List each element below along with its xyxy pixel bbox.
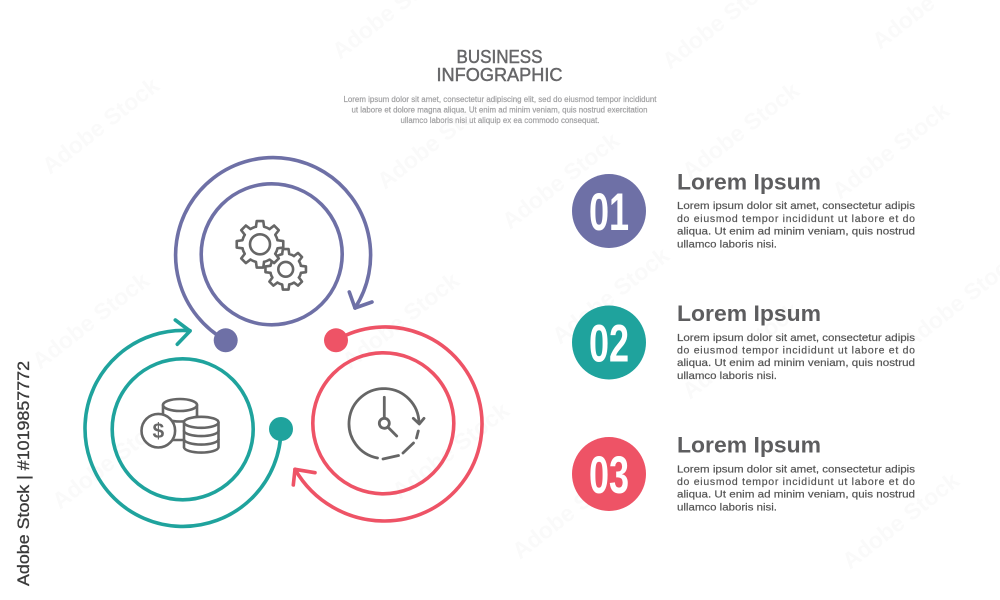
text: Adobe Stock — [37, 72, 164, 179]
step 2 text — [677, 301, 915, 382]
step 2 text: Lorem ipsum dolor sit amet, consectetur adipis — [677, 332, 915, 344]
step 2 text: Lorem Ipsum — [677, 301, 821, 326]
step 1 text: ullamco laboris nisi. — [677, 238, 777, 250]
title: BUSINESS — [456, 46, 542, 67]
red cycle ring — [293, 327, 482, 521]
step 2 text: aliqua. Ut enim ad minim veniam, quis nostrud — [677, 357, 915, 369]
intro text block: Lorem ipsum dolor sit amet, consectetur adipiscing elit, sed do eiusmod tempor incididunt — [344, 95, 657, 104]
step 3 badge: 03 — [589, 445, 629, 505]
text: Adobe Stock — [387, 397, 514, 504]
step 1 text: do eiusmod tempor incididunt ut labore et do — [677, 213, 915, 225]
intro text block — [344, 95, 657, 125]
text: Adobe Stock — [27, 267, 154, 374]
step 2 badge: 02 — [589, 314, 629, 373]
intro text block: ut labore et dolore magna aliqua. Ut enim ad minim veniam, quis nostrud exercitation — [352, 106, 648, 114]
icon: gears — [237, 221, 306, 290]
step 3 text: aliqua. Ut enim ad minim veniam, quis nostrud — [677, 488, 915, 500]
step 2 text: do eiusmod tempor incididunt ut labore et do — [677, 344, 915, 356]
icon: coins — [142, 399, 218, 453]
teal cycle ring — [85, 320, 293, 526]
title: INFOGRAPHIC — [436, 64, 562, 85]
text: Adobe Stock — [372, 87, 499, 194]
step 3 text: do eiusmod tempor incididunt ut labore et do — [677, 476, 915, 488]
step 3 text — [677, 432, 915, 514]
step 3 badge — [572, 437, 646, 511]
step 3 text: ullamco laboris nisi. — [677, 502, 777, 514]
step 3 text: Lorem Ipsum — [677, 432, 821, 458]
step 1 badge — [572, 174, 646, 248]
step 1 text: aliqua. Ut enim ad minim veniam, quis nostrud — [677, 226, 915, 238]
stock id side label: Adobe Stock | #1019857772 — [14, 361, 33, 586]
step 1 text: Lorem Ipsum — [677, 170, 821, 194]
purple cycle ring — [176, 158, 372, 352]
text: Adobe Stock — [837, 467, 964, 574]
text: Adobe Stock — [827, 97, 954, 204]
icon: coins: $ — [152, 420, 164, 443]
text: Adobe Stock — [677, 297, 804, 404]
step 1 text — [677, 170, 915, 250]
step 2 badge — [572, 306, 646, 380]
text: Adobe Stock — [337, 267, 464, 374]
title — [436, 46, 562, 85]
text: Adobe Stock — [547, 242, 674, 349]
step 3 text: Lorem ipsum dolor sit amet, consectetur adipis — [677, 464, 915, 476]
text: Adobe Stock — [677, 77, 804, 184]
step 1 text: Lorem ipsum dolor sit amet, consectetur adipis — [677, 200, 915, 212]
step 1 badge: 01 — [589, 182, 629, 242]
step 2 text: ullamco laboris nisi. — [677, 370, 777, 382]
intro text block: ullamco laboris nisi ut aliquip ex ea commodo consequat. — [400, 116, 600, 125]
text: Adobe Stock — [47, 407, 174, 514]
icon: clock — [349, 389, 424, 459]
text: Adobe Stock — [497, 127, 624, 234]
text: Adobe Stock — [507, 457, 634, 564]
